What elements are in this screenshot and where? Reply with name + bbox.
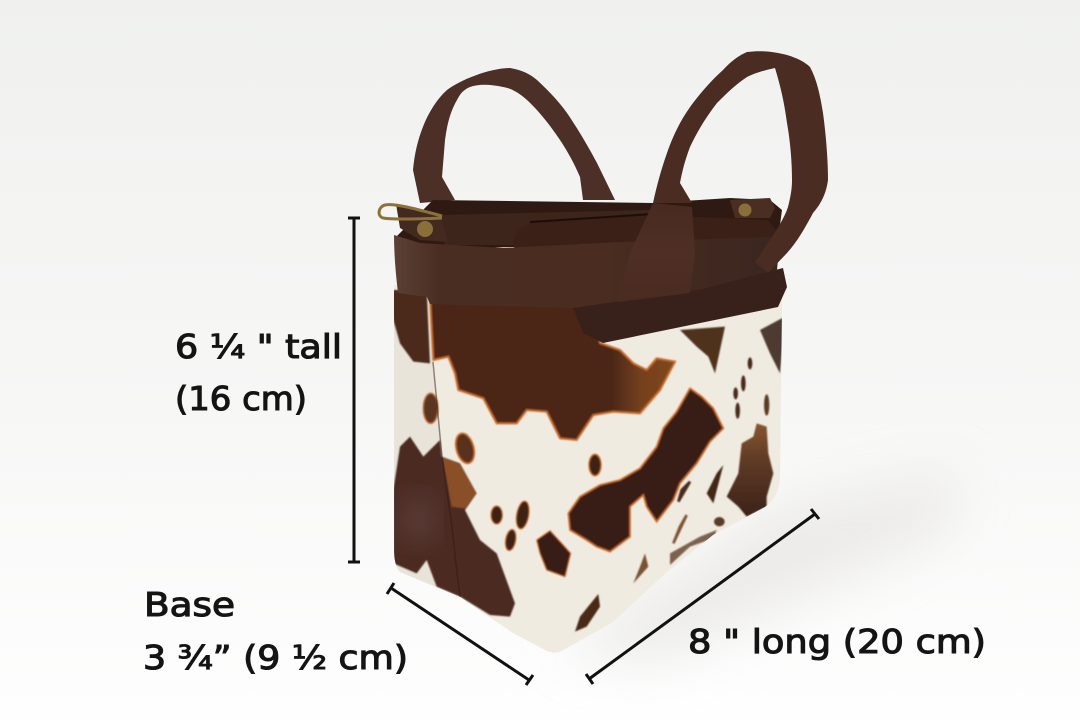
lower leather band	[573, 268, 787, 343]
small right spots	[707, 465, 723, 503]
icon: brass ring and tab	[379, 204, 448, 242]
text: height label: (16 cm)	[175, 379, 307, 418]
arrow: base depth	[387, 583, 533, 685]
round spot	[589, 454, 601, 476]
icon: front ribbon	[618, 203, 695, 302]
text: length label: 8 " long (20 cm)	[688, 622, 986, 661]
text: height label: 6 ¼ " tall	[175, 327, 342, 366]
side top spot	[390, 290, 430, 363]
icon: far strap of front handle	[653, 51, 828, 273]
right spot	[727, 423, 773, 517]
soft floor shadow	[560, 470, 960, 660]
upper leather band	[394, 235, 780, 308]
icon: back handle	[413, 68, 615, 203]
top right spots	[760, 317, 785, 373]
side panel shade	[396, 565, 458, 596]
icon: right snap tab	[730, 198, 775, 218]
inner lining	[440, 210, 650, 245]
text: height label	[175, 327, 342, 418]
bottom spot	[575, 594, 600, 632]
center spot	[568, 388, 723, 552]
lobed spot	[537, 531, 571, 577]
text: base label	[143, 585, 408, 677]
bag photo	[379, 51, 828, 660]
three dots	[491, 506, 502, 524]
cow print body	[380, 285, 800, 660]
zip line	[530, 214, 653, 222]
bag interior	[397, 198, 782, 250]
cow spots	[390, 290, 785, 632]
inner zip pocket	[513, 215, 778, 250]
arrow: height	[348, 218, 360, 562]
text: base label: 3 ¾” (9 ½ cm)	[143, 638, 408, 677]
fur glint	[402, 498, 434, 542]
top spot	[430, 297, 675, 440]
side fold line	[433, 362, 460, 597]
text: base label: Base	[144, 585, 235, 624]
icon: brass snap	[738, 204, 752, 216]
left lower spot	[393, 437, 515, 617]
side small spot	[423, 393, 438, 423]
left small spot	[453, 431, 477, 465]
arrow: length	[586, 509, 819, 684]
orange-brown patch	[443, 457, 477, 508]
